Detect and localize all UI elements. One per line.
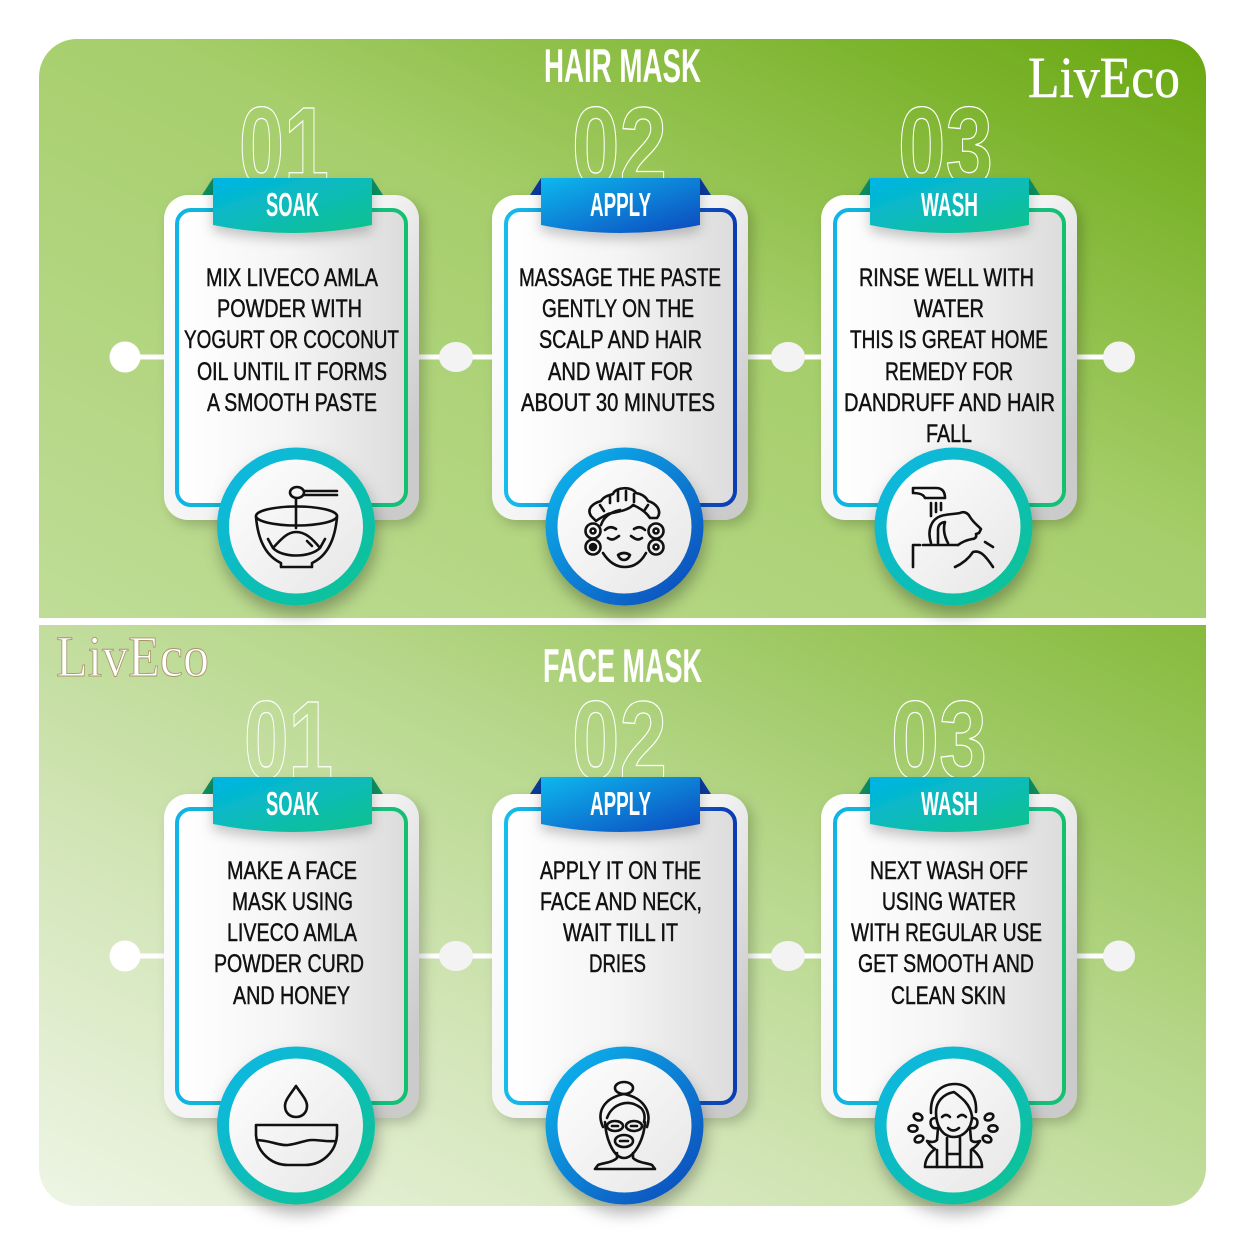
text: hair step 3 instructions: WATER [914,295,984,323]
text: face step 1 instructions [214,857,364,1010]
text: hair step 1 instructions: OIL UNTIL IT FORMS [197,358,387,386]
text: face step 1 instructions: MASK USING [232,888,353,916]
panel: hair step 2 apply [492,178,748,606]
panel: face step 1 soak [164,777,419,1204]
text: hair step 1 instructions: POWDER WITH [217,295,362,323]
label: apply: APPLY [590,186,651,223]
step number: hair 02: 02 [572,85,667,208]
text: hair step 2 instructions: ABOUT 30 MINUTES [521,389,715,417]
text: hair step 2 instructions: AND WAIT FOR [548,358,693,386]
text: face step 2 instructions: WAIT TILL IT [563,919,678,947]
heading: face mask: FACE MASK [543,639,702,692]
text: face step 2 instructions: APPLY IT ON THE [540,857,701,885]
label: soak: SOAK [266,186,319,223]
icon ring: bowl [217,448,375,606]
heading: hair mask: HAIR MASK [544,39,701,92]
text: hair step 3 instructions: THIS IS GREAT HOME [850,326,1048,354]
text: face step 2 instructions: FACE AND NECK, [540,888,702,916]
text: face step 3 instructions [851,857,1042,1010]
panel: hair mask background [39,39,1206,618]
panel: hair step 3 wash [821,178,1077,606]
text: hair step 3 instructions: RINSE WELL WITH [859,264,1034,292]
logo: LivEco top right: LivEco [1028,45,1180,110]
panel: face step 3 wash [821,777,1077,1204]
step number: face 02: 02 [572,679,667,802]
connector nodes: hair mask row [110,342,1135,372]
text: hair step 1 instructions: MIX LIVECO AMLA [206,264,378,292]
text: hair step 2 instructions: GENTLY ON THE [542,295,694,323]
text: face step 3 instructions: GET SMOOTH AND [858,950,1034,978]
step number: hair 03: 03 [898,85,993,208]
icon: washing face with splashes [908,1084,998,1167]
text: face step 1 instructions: LIVECO AMLA [227,919,357,947]
text: face step 3 instructions: CLEAN SKIN [891,982,1006,1010]
text: hair step 1 instructions: A SMOOTH PASTE [207,389,377,417]
text: hair step 3 instructions [844,264,1055,448]
text: face step 3 instructions: NEXT WASH OFF [870,857,1028,885]
text: face step 3 instructions: WITH REGULAR USE [851,919,1042,947]
step number: face 03: 03 [891,679,987,802]
text: face step 3 instructions: USING WATER [882,888,1016,916]
text: face step 2 instructions [540,857,702,978]
label: soak: SOAK [266,785,319,822]
text: hair step 2 instructions [519,264,721,417]
text: hair step 3 instructions: REMEDY FOR [885,358,1013,386]
panel: face mask background [39,625,1206,1206]
connector nodes: face mask row [110,940,1135,972]
icon: drop over bowl [256,1086,337,1165]
text: hair step 2 instructions: MASSAGE THE PASTE [519,264,721,292]
step number: face 01: 01 [244,679,333,802]
icon ring: face mask [546,1046,704,1204]
text: face step 1 instructions: MAKE A FACE [227,857,357,885]
icon ring: hair rollers [546,448,704,606]
text: face step 2 instructions: DRIES [589,950,646,978]
panel: face step 2 apply [492,777,748,1204]
text: hair step 1 instructions [184,264,399,417]
icon: woman with hair rollers [586,488,664,567]
logo: LivEco left: LivEco [56,624,209,689]
icon ring: hair wash [874,448,1032,606]
icon: woman with face mask [595,1082,655,1169]
label: apply: APPLY [590,785,651,822]
text: hair step 1 instructions: YOGURT OR COCONUT [184,326,399,354]
text: hair step 3 instructions: FALL [926,420,972,448]
label: wash: WASH [921,785,978,822]
text: face step 1 instructions: AND HONEY [233,982,350,1010]
step number: hair 01: 01 [239,85,329,208]
text: face step 1 instructions: POWDER CURD [214,950,364,978]
icon ring: drop and bowl [217,1046,375,1204]
panel: hair step 1 soak [164,178,419,606]
label: wash: WASH [921,186,978,223]
text: hair step 2 instructions: SCALP AND HAIR [539,326,702,354]
icon: bowl and spoon [256,487,337,567]
icon ring: face wash [874,1046,1032,1204]
icon: hair wash under tap [913,488,993,567]
text: hair step 3 instructions: DANDRUFF AND HAIR [844,389,1055,417]
